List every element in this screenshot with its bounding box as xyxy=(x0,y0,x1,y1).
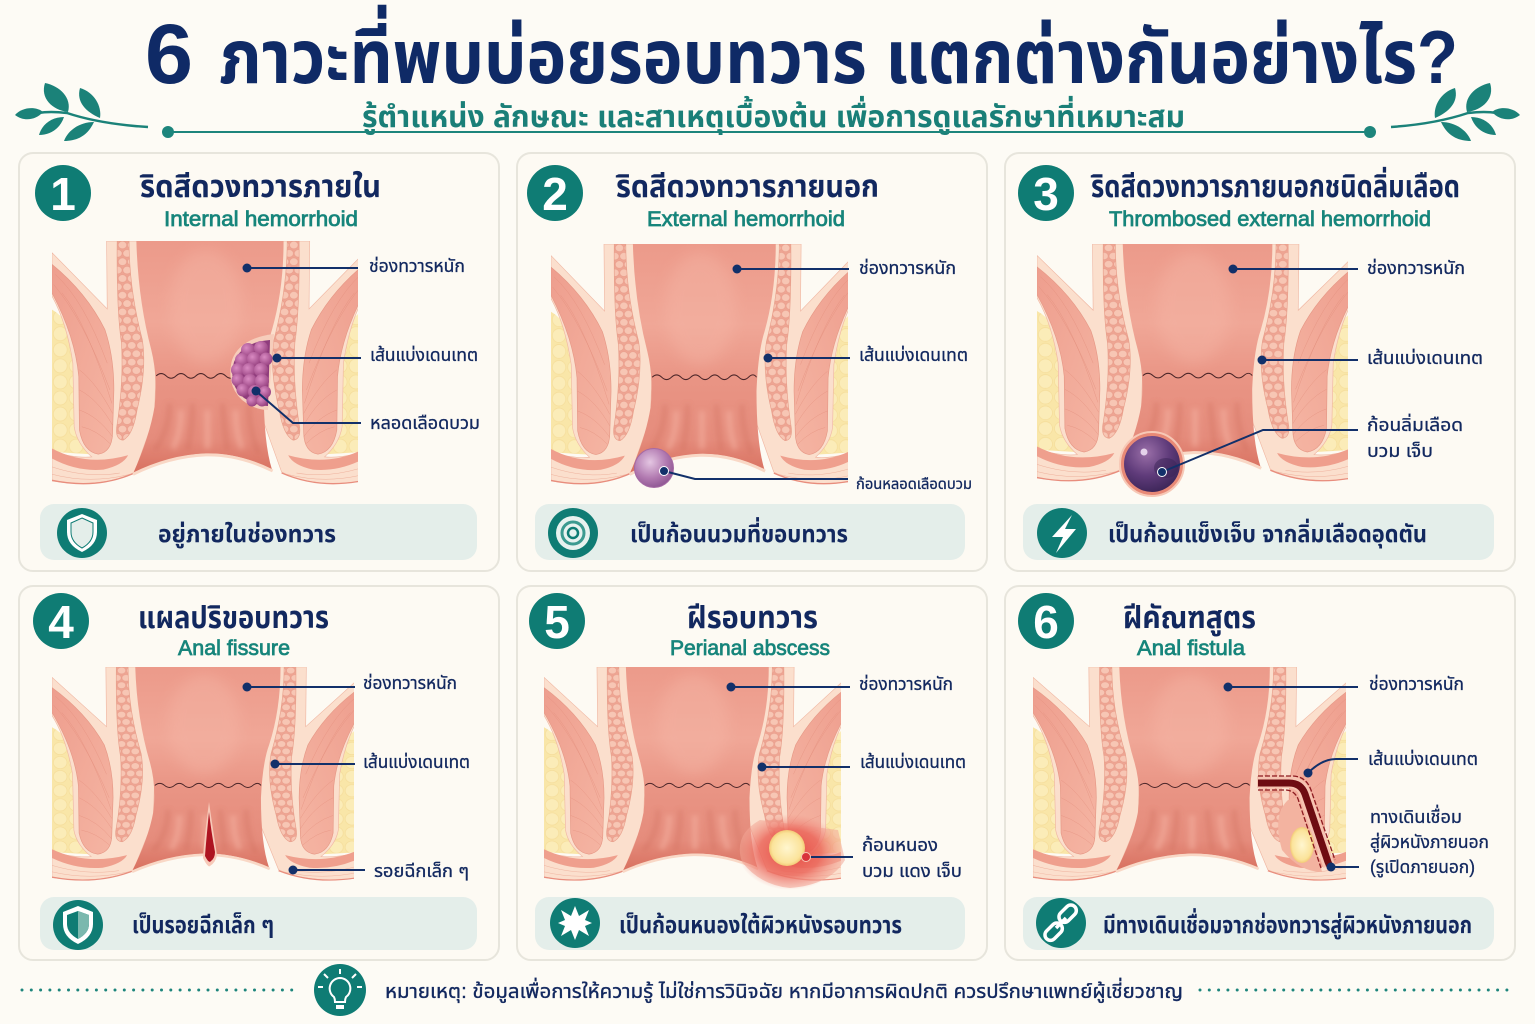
label: rectum xyxy=(726,674,953,694)
icon: chain link xyxy=(1036,898,1086,948)
badge 5: 5 xyxy=(544,596,570,648)
panel: perianal abscess xyxy=(517,586,987,960)
heading: ริดสีดวงทวารภายนอกชนิดลิ่มเลือด xyxy=(1091,166,1460,204)
label: dentate line: เส้นแบ่งเดนเทต xyxy=(370,345,478,365)
panel: anal fistula xyxy=(1005,586,1515,960)
label: dentate line xyxy=(764,345,968,365)
anatomy illustration xyxy=(1033,667,1352,880)
anatomy illustration xyxy=(52,241,364,484)
label: swollen vessel: หลอดเลือดบวม xyxy=(370,413,480,433)
label: external swelling xyxy=(660,466,972,493)
abscess xyxy=(738,814,845,890)
label: tear xyxy=(288,861,469,881)
label: tear: รอยฉีกเล็ก ๆ xyxy=(374,861,469,881)
icon: shield xyxy=(57,508,107,558)
summary bar: เป็นก้อนนวมที่ขอบทวาร xyxy=(630,517,848,548)
label: dentate line: เส้นแบ่งเดนเทต xyxy=(859,345,968,365)
summary bar: เป็นก้อนแข็งเจ็บ จากลิ่มเลือดอุดตัน xyxy=(1108,518,1427,549)
summary bar: เป็นรอยฉีกเล็ก ๆ xyxy=(132,912,274,939)
label: fistula opening xyxy=(1326,804,1489,879)
heading: ฝีคัณฑสูตร xyxy=(1123,600,1256,636)
label: rectum: ช่องทวารหนัก xyxy=(859,674,953,694)
header rule xyxy=(162,126,1376,138)
label: rectum: ช่องทวารหนัก xyxy=(363,673,457,693)
subtitle: รู้ตำแหน่ง ลักษณะ และสาเหตุเบื้องต้น เพื่อการดูแลรักษาที่เหมาะสม xyxy=(362,95,1185,135)
badge 4 xyxy=(33,593,89,649)
label: rectum xyxy=(242,256,465,276)
label: dentate line xyxy=(270,752,470,772)
summary bar xyxy=(40,897,477,950)
icon: burst xyxy=(550,898,600,948)
label: rectum xyxy=(242,673,457,693)
footer note: หมายเหตุ: ข้อมูลเพื่อการให้ความรู้ ไม่ใช่การวินิจฉัย หากมีอาการผิดปกติ ควรปรึกษาแพทย์ผู้เชี่ยวชาญ xyxy=(385,977,1183,1004)
badge 6: 6 xyxy=(1033,596,1059,648)
label: dentate line: เส้นแบ่งเดนเทต xyxy=(1368,749,1478,769)
label: abscess xyxy=(802,835,962,881)
label: fistula opening: (รูเปิดภายนอก) xyxy=(1370,857,1475,879)
label: fistula opening: ทางเดินเชื่อม xyxy=(1370,804,1462,827)
label: rectum: ช่องทวารหนัก xyxy=(859,258,956,278)
badge 6 xyxy=(1018,593,1074,649)
summary bar: เป็นก้อนหนองใต้ผิวหนังรอบทวาร xyxy=(619,911,902,939)
label: fistula opening: สู่ผิวหนังภายนอก xyxy=(1370,832,1489,854)
icon: left leaf sprig xyxy=(15,83,148,141)
english name: Anal fissure xyxy=(178,637,290,660)
label: dentate line xyxy=(758,752,966,772)
label: external swelling: ก้อนหลอดเลือดบวม xyxy=(856,476,972,493)
heading: ฝีรอบทวาร xyxy=(687,600,818,635)
icon: lightning xyxy=(1037,508,1087,558)
summary bar xyxy=(535,504,965,560)
english name: Perianal abscess xyxy=(670,637,830,660)
label: rectum: ช่องทวารหนัก xyxy=(1367,258,1465,278)
badge 2 xyxy=(527,165,583,221)
anatomy illustration xyxy=(544,667,847,880)
label: rectum xyxy=(732,258,956,278)
label: dentate line xyxy=(1304,749,1478,778)
label: clot: บวม เจ็บ xyxy=(1367,441,1433,461)
label: clot xyxy=(1158,413,1463,476)
label: dentate line: เส้นแบ่งเดนเทต xyxy=(363,752,470,772)
panel: anal fissure xyxy=(19,586,499,960)
fissure tear xyxy=(203,802,217,866)
icon: light bulb xyxy=(314,964,366,1016)
footer note xyxy=(22,964,1515,1016)
label: rectum xyxy=(1228,258,1465,278)
label: rectum: ช่องทวารหนัก xyxy=(369,256,465,276)
external swelling xyxy=(634,448,674,488)
heading: ริดสีดวงทวารภายนอก xyxy=(615,169,879,204)
label: abscess: บวม แดง เจ็บ xyxy=(862,861,962,881)
summary bar xyxy=(40,504,477,560)
title: 6 xyxy=(145,7,193,101)
panel: internal hemorrhoid xyxy=(19,153,499,571)
thrombosed clot xyxy=(1120,432,1184,496)
swollen vessel cluster xyxy=(230,334,274,410)
fistula tract xyxy=(1257,776,1335,872)
summary bar xyxy=(535,897,965,950)
anatomy illustration xyxy=(551,244,854,484)
panel: thrombosed external hemorrhoid xyxy=(1005,153,1515,571)
anatomy illustration xyxy=(1037,244,1354,481)
heading: ริดสีดวงทวารภายใน xyxy=(139,169,381,204)
icon: shield xyxy=(53,900,103,950)
english name: External hemorrhoid xyxy=(647,208,845,231)
anatomy illustration xyxy=(52,667,360,880)
english name: Internal hemorrhoid xyxy=(164,208,358,231)
label: rectum: ช่องทวารหนัก xyxy=(1369,674,1464,694)
label: swollen vessel xyxy=(252,386,480,433)
summary bar xyxy=(1023,504,1494,560)
english name: Anal fistula xyxy=(1137,637,1245,660)
icon: right leaf sprig xyxy=(1391,83,1520,141)
label: clot: ก้อนลิ่มเลือด xyxy=(1367,413,1463,435)
badge 1: 1 xyxy=(50,168,76,220)
label: abscess: ก้อนหนอง xyxy=(862,835,938,855)
heading: แผลปริขอบทวาร xyxy=(138,600,329,635)
label: dentate line: เส้นแบ่งเดนเทต xyxy=(1367,348,1483,368)
badge 1 xyxy=(35,165,91,221)
badge 5 xyxy=(529,593,585,649)
label: dentate line xyxy=(272,345,478,365)
label: rectum xyxy=(1224,674,1464,694)
badge 2: 2 xyxy=(542,168,568,220)
english name: Thrombosed external hemorrhoid xyxy=(1109,208,1431,231)
label: dentate line: เส้นแบ่งเดนเทต xyxy=(860,752,966,772)
label: dentate line xyxy=(1258,348,1483,368)
badge 3 xyxy=(1018,165,1074,221)
badge 4: 4 xyxy=(48,596,74,648)
summary bar xyxy=(1023,897,1494,950)
badge 3: 3 xyxy=(1033,168,1059,220)
summary bar: อยู่ภายในช่องทวาร xyxy=(158,520,336,549)
panel: external hemorrhoid xyxy=(517,153,987,571)
icon: target xyxy=(548,508,598,558)
